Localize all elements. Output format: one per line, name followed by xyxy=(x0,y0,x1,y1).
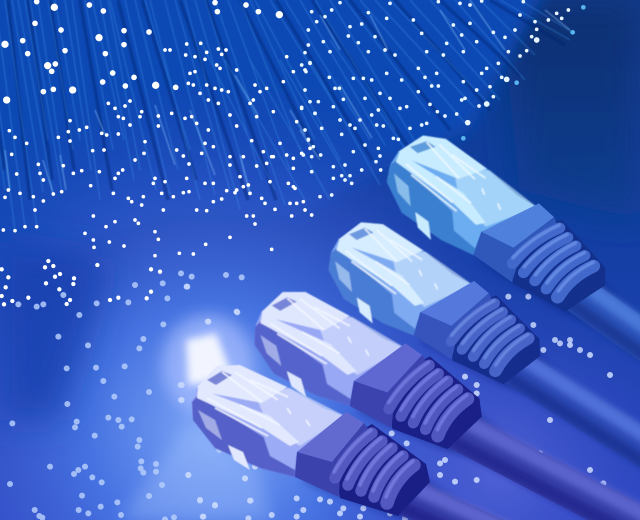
dark upper right corner xyxy=(500,0,640,220)
fibre tips: lower left bokeh xyxy=(2,261,255,519)
light source flare xyxy=(186,333,234,385)
lit fibre mass xyxy=(0,0,550,310)
glow lower right xyxy=(300,270,640,520)
light ray xyxy=(120,420,270,520)
fibre tips: upper right cluster xyxy=(302,1,583,197)
fibre optic strands xyxy=(0,0,572,230)
fibre tips: lower right bokeh xyxy=(182,287,610,518)
connector: second cable xyxy=(278,218,640,520)
light source halo xyxy=(162,315,254,415)
fibre tips: left cluster large xyxy=(3,2,315,256)
connector: third cable xyxy=(231,290,640,520)
connector: front cable xyxy=(192,365,640,520)
connector: top cable xyxy=(323,130,640,520)
fibre tips: beside top cable xyxy=(508,297,580,350)
left edge shading xyxy=(0,240,110,420)
